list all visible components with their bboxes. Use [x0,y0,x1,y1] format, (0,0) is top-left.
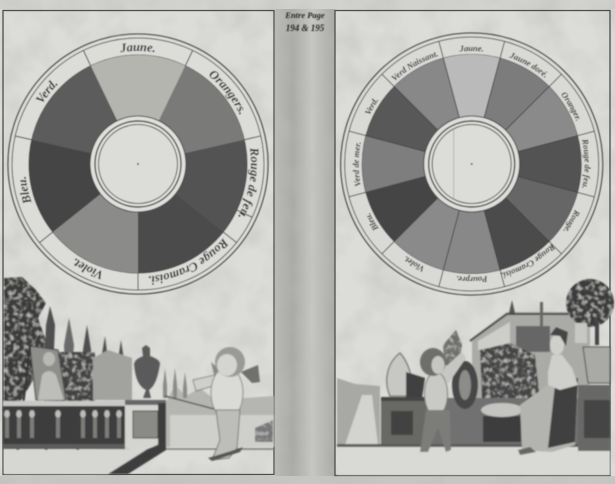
wedge: Jaune [91,55,185,164]
wedge: Verd [363,85,486,189]
cypress trees [45,306,187,398]
wedge: Pourpre [443,164,500,274]
building [470,300,590,400]
small tree [443,330,462,370]
wedge: Bleu [363,139,486,243]
ground and cast shadow [4,450,166,474]
hedge and building [45,352,95,402]
wheel labels: Verd de mer. [352,142,362,187]
wheel labels: Verd. [364,98,379,114]
seated lady [518,327,578,455]
wheel labels: Jaune doré. [508,52,548,78]
hub rings [424,116,520,212]
wedge: Rouge de feu [472,136,581,192]
wedge: Bleu [21,118,149,234]
wheel labels: Rouge de feu. [582,139,592,188]
chart: twelve colour wheel [339,32,604,296]
chart: seven colour wheel [6,32,270,296]
urn on pedestal [381,353,426,446]
wedge: Verd [23,59,167,201]
wheel labels [20,42,260,286]
panel: left plate frame [3,10,274,474]
wedge: Rouge [458,139,581,243]
pedestal with bust urn [125,345,166,447]
wheel labels: Violet. [74,258,102,280]
orange tree [566,279,614,383]
wedge: Rouge de feu [127,118,255,234]
wheel labels: Violet. [404,256,424,272]
caption: page reference: Entre Page [284,10,325,20]
wheel labels: Verd. [35,80,58,102]
painting on easel [17,346,78,460]
illustration: cherub and seated lady in a garden [337,279,614,475]
wheel labels [352,45,592,282]
wheel labels: Bleu. [20,176,32,204]
wedge: Orangers [109,59,253,201]
stool [481,403,523,442]
distant alley [337,378,380,445]
right pedestal [578,385,610,451]
hub rings [90,116,186,212]
illustration: cherub painter on a terrace [3,277,274,474]
wheel labels: Jaune. [459,45,484,52]
wedge: Verd de mer [362,136,472,192]
caption: page reference: 194 & 195 [286,23,325,33]
distant garden [166,385,274,447]
wedge: Violet [48,143,181,283]
cherub [165,347,260,461]
cherub with shield [420,348,478,452]
wedge: Verd Naissant [392,55,496,178]
wheel labels: Orangers. [209,70,244,115]
wheel labels: Pourpre. [456,274,488,282]
wheel labels: Rouge. [562,209,580,232]
wheel labels: Jaune. [120,42,155,53]
balustrade [3,401,125,449]
caption: page reference [284,10,325,33]
wheel labels: Bleu. [366,212,379,231]
wedge lines and band dividers [349,41,594,287]
wheel labels: Rouge Cramoisi. [148,238,229,286]
tree [4,277,50,402]
wheel labels: Rouge Cramoisi. [501,244,556,279]
wheel labels: Rouge de feu. [238,148,260,218]
foliage [480,343,540,400]
wedge: Jaune dore [447,55,551,178]
wedge: Violet [392,150,496,273]
panel: right plate frame [335,10,610,476]
wedge: Oranger [458,85,581,189]
wheel labels: Verd Naissant. [390,52,438,80]
wedge: Rouge Cramoisi [447,150,551,273]
wheel labels: Oranger. [561,92,580,122]
ground [337,447,610,475]
wedge: Jaune [443,54,500,164]
wedge: Rouge Cramoisi [95,143,228,283]
band dividers [15,50,261,290]
wall [425,398,580,445]
